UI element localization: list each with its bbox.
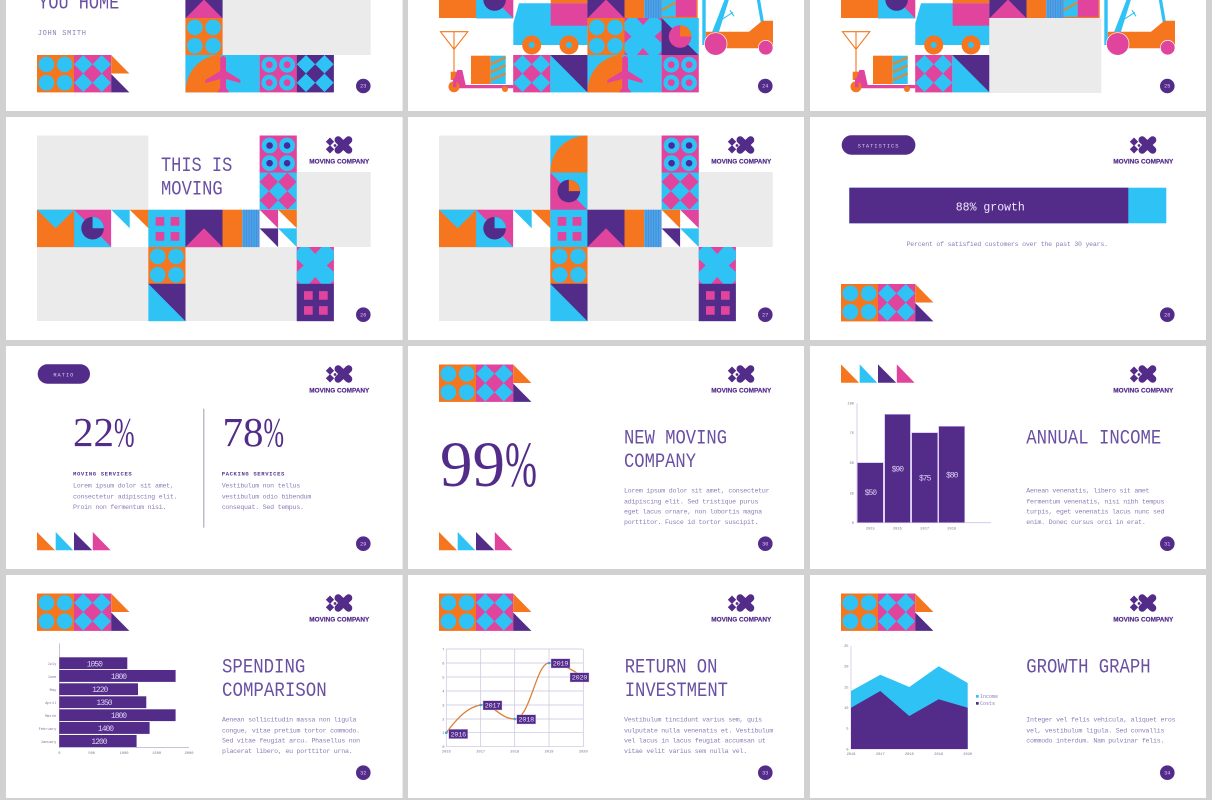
heading: COMPANY	[624, 451, 696, 474]
page number: 27	[762, 312, 768, 318]
body text: Lorem ipsum dolor sit amet, consectetur	[624, 488, 770, 495]
stat text: consectetur adipiscing elit.	[73, 493, 177, 500]
body text: placerat libero, eu porttitor urna.	[222, 748, 352, 755]
panel: slide 28 statistics	[810, 117, 1206, 340]
heading	[624, 427, 727, 474]
bar chart: 25	[850, 492, 854, 496]
pattern strip	[841, 594, 933, 631]
horizontal bar chart: 1050	[87, 660, 103, 669]
pattern tiles	[37, 136, 334, 321]
horizontal bar chart: 1500	[152, 752, 161, 756]
pill label: STATISTICS	[858, 143, 899, 149]
progress bar: 88% growth	[956, 202, 1025, 215]
page number: 24	[762, 84, 768, 90]
gray placeholder	[989, 18, 1101, 93]
panel: slide 26	[6, 117, 403, 340]
area chart: 2016	[847, 753, 855, 757]
page number: 23	[360, 84, 366, 90]
bar chart: 50	[850, 462, 854, 466]
slide background	[408, 117, 804, 340]
title: THIS IS	[161, 155, 232, 178]
illustration: truck, forklift and tiles	[841, 0, 1175, 92]
area chart: 2018	[905, 753, 914, 757]
stat text	[73, 483, 177, 511]
page number	[1160, 307, 1175, 322]
line chart: 2016	[442, 751, 451, 755]
author: JOHN SMITH	[38, 30, 87, 38]
panel: slide 25	[810, 0, 1206, 111]
slide background	[408, 575, 804, 798]
logo	[711, 366, 772, 395]
body text	[1026, 717, 1176, 745]
legend	[976, 694, 998, 707]
heading: SPENDING	[222, 656, 305, 679]
page number	[356, 79, 371, 93]
body text: congue, vitae pretium tortor commodo.	[222, 727, 360, 734]
body text: Aenean venenatis, libero sit amet	[1026, 488, 1150, 495]
stat text: Lorem ipsum dolor sit amet,	[73, 483, 174, 490]
divider	[203, 409, 204, 528]
page number	[1160, 79, 1175, 93]
horizontal bar chart: 0	[58, 752, 60, 756]
panel: slide 27	[408, 117, 804, 340]
pattern strip	[439, 594, 531, 631]
top tiles	[439, 0, 513, 18]
stat: 22%: 22%	[73, 409, 134, 455]
slide background	[810, 117, 1206, 340]
panel: slide 30	[408, 346, 804, 569]
horizontal bar chart: 1200	[91, 738, 108, 747]
stat: 99%: 99%	[440, 429, 537, 501]
pill label: RATIO	[53, 372, 74, 378]
page number: 32	[360, 770, 366, 776]
line chart: 6	[442, 662, 444, 666]
logo	[1113, 596, 1174, 624]
bar chart: 2016	[893, 527, 902, 531]
horizontal bar chart: 1350	[96, 699, 113, 708]
stat label: MOVING SERVICES	[73, 470, 132, 477]
page number	[1160, 765, 1175, 780]
stat label: PACKING SERVICES	[222, 470, 285, 477]
stat text: vestibulum odio bibendum	[222, 493, 311, 500]
heading: COMPARISON	[222, 680, 327, 703]
stat: 78%: 78%	[222, 409, 284, 455]
stat text: Proin non fermentum nisi.	[73, 504, 166, 511]
gray placeholder	[222, 0, 371, 55]
gray placeholders	[439, 136, 773, 321]
pattern tiles	[439, 136, 736, 321]
line chart	[442, 648, 589, 755]
page number	[1160, 536, 1175, 551]
logo	[309, 596, 370, 624]
body text: Integer vel felis vehicula, aliquet eros	[1026, 717, 1176, 724]
body text: eget lacus ornare, non lobortis magna	[624, 509, 762, 516]
horizontal bar chart: 1220	[92, 686, 109, 695]
line chart: 3	[442, 704, 444, 708]
pattern strip	[37, 594, 129, 631]
body text	[1026, 488, 1164, 526]
heading: ANNUAL INCOME	[1026, 428, 1161, 451]
page number: 29	[360, 541, 366, 547]
panel: slide 23	[6, 0, 403, 111]
panel: slide 24	[408, 0, 804, 111]
page number: 25	[1164, 84, 1170, 90]
logo	[309, 366, 370, 395]
body text: turpis, eget venenatis lacus nunc sed	[1026, 509, 1164, 516]
icon: hand truck	[440, 32, 513, 92]
bar chart: $80	[946, 472, 959, 481]
heading: RETURN ON	[625, 656, 717, 679]
page number	[356, 765, 371, 780]
line chart: 2018	[510, 751, 519, 755]
horizontal bar chart	[39, 643, 193, 756]
pattern strip	[439, 364, 531, 402]
logo	[711, 138, 772, 166]
area chart: 20	[844, 666, 848, 670]
bar chart: $50	[865, 489, 877, 498]
line chart: 5	[442, 676, 444, 680]
horizontal bar chart: 1800	[111, 673, 127, 682]
panel: slide 32 spending comparison	[6, 575, 403, 798]
line chart: 2017	[485, 703, 500, 711]
slide background	[408, 346, 804, 569]
body text: Vestibulum tincidunt varius sem, quis	[624, 717, 762, 724]
body text	[624, 717, 773, 755]
pattern tiles	[513, 0, 699, 92]
logo	[1113, 366, 1174, 395]
pill label	[842, 135, 915, 155]
pattern strip	[37, 55, 129, 92]
body text: Aenean sollicitudin massa non ligula	[222, 717, 356, 724]
stat text	[222, 483, 311, 511]
page number: 30	[762, 541, 768, 547]
title line 2: MOVING	[161, 178, 223, 201]
line chart: 2020	[572, 675, 587, 683]
body text: commodo interdum. Nam pulvinar felis.	[1026, 738, 1164, 745]
body text: fermentum venenatis, nisi nibh tempus	[1026, 498, 1164, 505]
triangle row	[37, 532, 111, 550]
area chart: 0	[846, 748, 848, 752]
triangle row	[841, 364, 915, 383]
pattern strip	[841, 284, 933, 321]
line chart: 7	[442, 648, 444, 652]
icon: forklift	[702, 0, 773, 55]
body text	[222, 717, 360, 755]
triangle row	[439, 532, 513, 550]
horizontal bar chart: February	[39, 727, 57, 732]
line chart: 0	[442, 746, 444, 750]
page number	[356, 307, 371, 322]
line chart: 1	[442, 732, 445, 736]
slide background	[6, 346, 403, 569]
body text: enim. Donec cursus orci in erat.	[1026, 519, 1146, 526]
legend: Income	[980, 694, 998, 700]
legend: Costs	[980, 701, 995, 707]
progress bar	[849, 188, 1166, 223]
bar chart: $75	[919, 475, 932, 484]
icon: truck	[513, 0, 587, 54]
page number: 26	[360, 312, 366, 318]
panel: slide 34 growth graph	[810, 575, 1206, 798]
horizontal bar chart: January	[41, 741, 57, 745]
panel: slide 29 ratio	[6, 346, 403, 569]
area chart: 2020	[963, 753, 972, 757]
bar chart: 0	[852, 522, 854, 526]
caption: Percent of satisfied customers over the past 30 years.	[907, 241, 1108, 248]
slide background	[6, 117, 403, 340]
area chart: 25	[844, 645, 848, 649]
line chart: 2016	[450, 731, 466, 739]
heading: GROWTH GRAPH	[1026, 656, 1151, 679]
horizontal bar chart: 2000	[185, 752, 193, 756]
area chart: 2019	[934, 753, 943, 757]
page number	[758, 79, 773, 93]
pattern tiles	[185, 0, 334, 92]
body text: vulputate nulla venenatis et. Vestibulum	[624, 727, 773, 734]
bar chart: 2018	[947, 527, 956, 531]
area chart	[844, 645, 972, 757]
line chart: 2017	[476, 751, 485, 755]
panel: slide 33 return on investment	[408, 575, 804, 798]
page number: 33	[762, 770, 768, 776]
bar chart: 100	[847, 402, 854, 406]
heading	[625, 656, 728, 703]
body text: porttitor. Fusce id tortor suscipit.	[624, 519, 758, 526]
body text: vel, vestibulum ligula. Sed convallis	[1026, 727, 1164, 734]
line chart: 2020	[579, 751, 588, 755]
slide background	[810, 0, 1206, 111]
page number: 34	[1164, 770, 1170, 776]
gray placeholders	[37, 136, 371, 321]
area chart: 15	[844, 686, 848, 690]
logo	[1113, 138, 1174, 166]
horizontal bar chart: 1800	[111, 712, 127, 721]
line chart: 2	[442, 718, 444, 722]
stat text: Vestibulum non tellus	[222, 483, 300, 490]
horizontal bar chart: 1000	[120, 752, 128, 756]
body text: vel lacus in lacus feugiat accumsan ut	[624, 738, 766, 745]
page number: 28	[1164, 312, 1170, 318]
logo	[711, 596, 772, 624]
slide background	[810, 346, 1206, 569]
area chart: 5	[846, 728, 848, 732]
horizontal bar chart: April	[45, 701, 57, 706]
slide background	[810, 575, 1206, 798]
pill label	[38, 364, 90, 384]
horizontal bar chart: 1400	[98, 725, 114, 734]
bar chart	[847, 402, 991, 531]
horizontal bar chart: June	[47, 676, 56, 680]
bar chart: 2015	[866, 527, 875, 531]
page number: 31	[1164, 541, 1170, 547]
line chart: 2019	[553, 661, 568, 669]
heading: INVESTMENT	[625, 680, 728, 703]
slide background	[408, 0, 804, 111]
illustration: truck, forklift and tiles	[439, 0, 773, 92]
horizontal bar chart: May	[50, 689, 57, 693]
page number	[758, 536, 773, 551]
horizontal bar chart: 500	[88, 752, 95, 756]
heading	[222, 656, 327, 703]
slide background	[6, 575, 403, 798]
bar chart: 75	[850, 432, 854, 436]
line chart: 4	[442, 690, 445, 694]
body text: adipiscing elit. Sed tristique purus	[624, 498, 758, 505]
page number	[356, 536, 371, 551]
page number	[758, 765, 773, 780]
horizontal bar chart: July	[47, 662, 57, 667]
page number	[758, 307, 773, 322]
area chart: 2017	[876, 753, 885, 757]
horizontal bar chart: March	[45, 714, 56, 719]
area chart: 10	[844, 707, 848, 711]
panel: slide 31 annual income	[810, 346, 1206, 569]
body text	[624, 488, 770, 526]
body text: vitae velit varius sem nulla vel.	[624, 748, 747, 755]
bar chart: $90	[892, 466, 904, 475]
line chart: 2019	[545, 751, 553, 755]
logo	[309, 138, 370, 166]
body text: Sed vitae feugiat arcu. Phasellus non	[222, 738, 360, 745]
line chart: 2018	[518, 717, 534, 725]
bar chart: 2017	[920, 527, 929, 531]
stat text: consequat. Sed tempus.	[222, 504, 304, 511]
heading: NEW MOVING	[624, 427, 727, 450]
slide background	[6, 0, 403, 111]
